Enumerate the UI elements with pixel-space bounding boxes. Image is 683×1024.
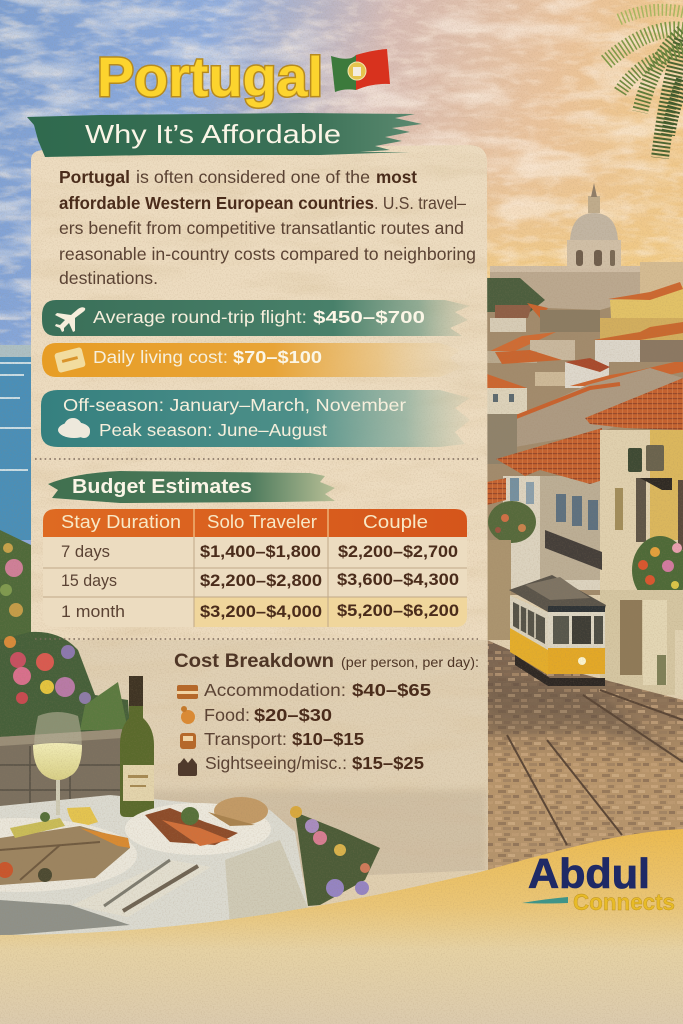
stone retaining wall [487,368,683,452]
table row: 15 days [61,570,459,590]
callout: daily living cost: Daily living cost: [93,347,228,367]
illustration: cobblestone street with tram tracks [487,640,683,890]
napkin and cutlery [72,860,211,917]
icon: cloud [58,418,90,438]
icon: food [181,706,195,724]
text block: intro paragraph: destinations. [59,268,158,288]
table row: 7 days: $2,200–$2,700 [338,542,458,561]
logo swoosh [522,897,568,904]
wine bottle [120,676,154,817]
lemon [67,807,98,827]
list: accommodation: $40–$65 [352,680,431,700]
table header: Solo Traveler [207,512,317,532]
text block: intro paragraph: . U.S. travel– [374,193,466,213]
heading: cost breakdown: Cost Breakdown [174,651,334,672]
illustration: Lisbon hillside city [487,183,683,695]
table row: 1 month: $3,200–$4,000 [200,602,322,621]
callout: daily living cost [42,343,462,377]
heading text: Why It’s Affordable [85,119,341,149]
table header [61,512,428,532]
house: white walls [503,476,602,590]
roof: corner house [585,378,683,430]
list: transport [180,729,364,749]
street lantern [628,445,672,490]
callout: flight cost: Average round-trip flight: [93,307,307,327]
plate: grilled fish [0,812,137,892]
flower bed [0,632,130,737]
list: sightseeing: Sightseeing/misc.: [205,753,347,773]
list: accommodation [177,680,431,700]
icon: airplane [55,307,85,332]
tablecloth [0,795,308,936]
plate: meat and bread [125,797,271,855]
heading brush: why it's affordable [27,113,422,157]
text block: intro paragraph: most [376,167,417,187]
heading brush: budget estimates [48,471,335,503]
footer: sand wave [0,829,683,1024]
icon: bus [180,733,196,749]
text block: intro paragraph [59,167,476,288]
balcony [545,530,602,570]
building: right corner house [600,430,683,695]
table row: 15 days: $3,600–$4,300 [337,570,459,589]
list: food: Food: [204,705,250,725]
wine glass [33,712,82,815]
table row: 1 month: 1 month [61,602,125,621]
text block: intro paragraph: affordable Western European countries [59,193,374,213]
logo: Abdul Connects [522,850,675,915]
logo: Abdul Connects: Connects [573,889,675,915]
callout: seasons: Peak season: June–August [99,420,327,440]
list: sightseeing [178,753,424,776]
flowers: beside table [290,806,380,906]
icon: ticket [54,347,86,373]
table header: Stay Duration [61,512,181,532]
list: sightseeing: $15–$25 [352,753,424,773]
domed church [490,183,642,310]
rooftops band [487,322,683,414]
text block: intro paragraph: ers benefit from competitive transatlantic routes and [59,218,464,238]
list: food [181,705,332,725]
heading text: Budget Estimates [72,475,252,498]
background: sunset sky [0,0,683,560]
list: transport: $10–$15 [292,729,364,749]
table row: 15 days: $2,200–$2,800 [200,571,322,590]
text block: intro paragraph: is often considered one of the [136,167,370,187]
illustration: palm fronds [606,10,683,158]
text block: intro paragraph: reasonable in-country costs compared to neighboring [59,244,476,264]
callout: flight cost: $450–$700 [313,307,425,327]
table row: 1 month [61,601,459,621]
table header: Couple [363,512,428,532]
table row: 7 days: $1,400–$1,800 [200,542,321,561]
flowers: hanging basket right [632,536,683,604]
text block: intro paragraph: Portugal [59,167,130,187]
icon: bag [178,758,197,776]
title: Portugal [97,45,323,108]
roof: middle terrace [496,428,603,484]
heading: cost breakdown: (per person, per day): [341,655,479,670]
icon: bed [177,685,198,699]
illustration: sea at left edge [0,345,31,540]
illustration: dining table scene [0,632,380,936]
illustration: yellow tram [509,575,606,686]
callout: seasons: Off-season: January–March, November [63,395,406,415]
panel: main parchment [31,145,488,895]
table row: 7 days: 7 days [61,542,110,561]
logo: Abdul Connects: Abdul [528,850,650,897]
lower right wall and door [600,590,683,695]
list: transport: Transport: [204,729,287,749]
table row: 15 days: 15 days [61,571,117,590]
stone wall [0,729,122,815]
illustration: left garden plants [0,530,31,660]
table row: 1 month: $5,200–$6,200 [337,601,459,620]
table: budget estimates [43,509,467,627]
callout: daily living cost: $70–$100 [233,347,322,367]
hillside trees [487,278,545,312]
heading: cost breakdown [174,651,479,672]
callout: seasons [41,390,470,447]
callout: flight cost [42,300,470,336]
list: food: $20–$30 [254,705,332,725]
flowers: window box left [488,501,536,543]
icon: Portuguese flag [331,49,390,92]
list: accommodation: Accommodation: [204,680,346,700]
table row: 7 days [61,542,458,561]
